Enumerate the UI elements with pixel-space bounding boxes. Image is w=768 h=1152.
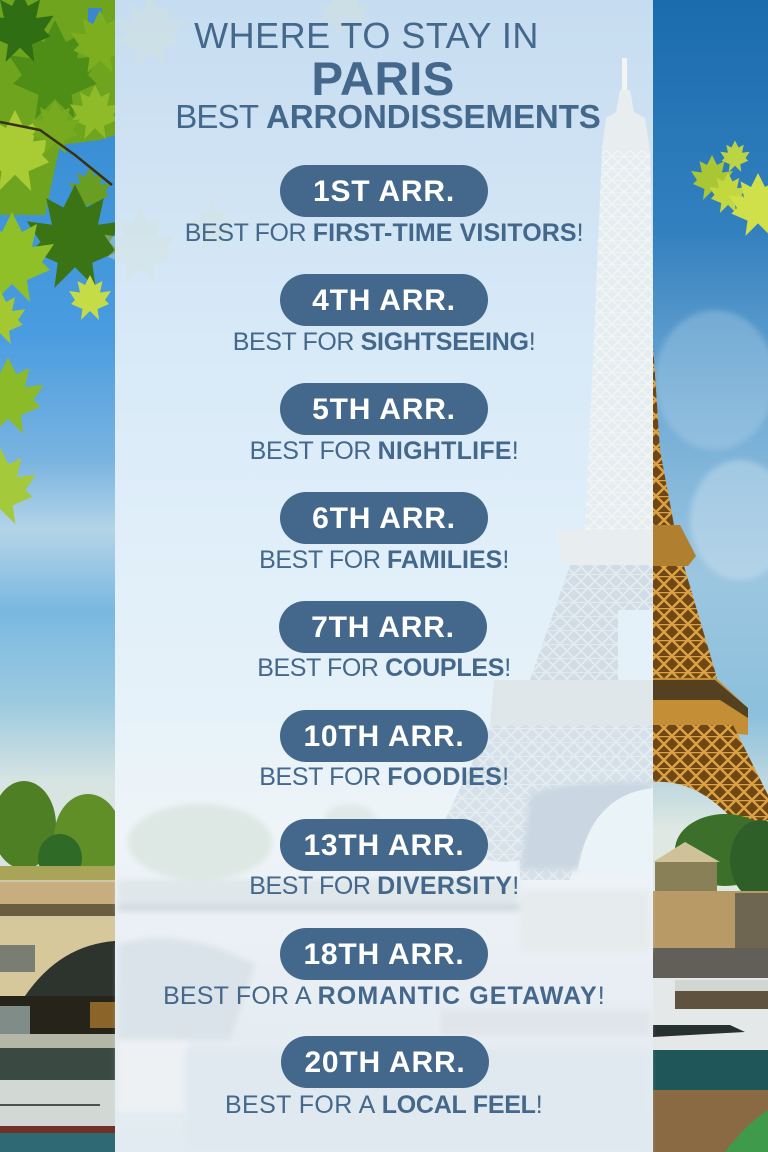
pill: 13th arr. [280,819,488,871]
label: first-time visitors: BEST FOR FIRST-TIME VISITORS! [185,219,583,247]
trees left [0,781,122,882]
pill: 6th arr. [280,492,488,544]
label: nightlife: BEST FOR NIGHTLIFE! [250,437,518,465]
pill: 18th arr.: 18TH ARR. [303,938,465,971]
bridge [0,880,115,996]
translucent center panel [115,0,653,1152]
title [175,15,601,135]
label: couples: BEST FOR COUPLES! [257,654,511,682]
pill: 10th arr.: 10TH ARR. [303,720,465,753]
label: local feel: BEST FOR A LOCAL FEEL! [225,1091,543,1119]
leaves top-left [0,0,129,524]
pale tower in panel [445,58,653,880]
pill: 4th arr.: 4TH ARR. [312,284,456,317]
pill: 10th arr. [280,710,488,762]
label: romantic getaway: BEST FOR A ROMANTIC GETAWAY! [163,982,605,1010]
water and boat left [0,996,115,1152]
label: diversity: BEST FOR DIVERSITY! [249,872,519,900]
pill: 13th arr.: 13TH ARR. [303,829,465,862]
quay and boat right [653,891,768,1152]
label: sightseeing: BEST FOR SIGHTSEEING! [233,328,535,356]
title line: Paris: PARIS [311,53,455,106]
pill: 4th arr. [280,274,488,326]
tower gold side [653,345,768,830]
label: foodies: BEST FOR FOODIES! [259,763,509,791]
pill: 20th arr. [281,1036,489,1088]
title line: best arrondissements: BEST ARRONDISSEMENTS [175,98,601,135]
label: families: BEST FOR FAMILIES! [259,546,509,574]
pale leaves in panel [104,0,370,284]
pill: 5th arr. [280,383,488,435]
pill: 1st arr.: 1ST ARR. [313,175,455,208]
pill: 1st arr. [280,165,488,217]
pill: 7th arr.: 7TH ARR. [311,611,455,644]
carousel and trees right [653,814,768,900]
pill: 18th arr. [280,928,488,980]
pill: 20th arr.: 20TH ARR. [304,1046,466,1079]
leaves right [691,140,768,236]
pill: 7th arr. [279,601,487,653]
pale lower scenery in panel [118,804,650,1152]
pill: 5th arr.: 5TH ARR. [312,393,456,426]
title line: where to stay in: WHERE TO STAY IN [194,15,539,56]
pill: 6th arr.: 6TH ARR. [312,502,456,535]
